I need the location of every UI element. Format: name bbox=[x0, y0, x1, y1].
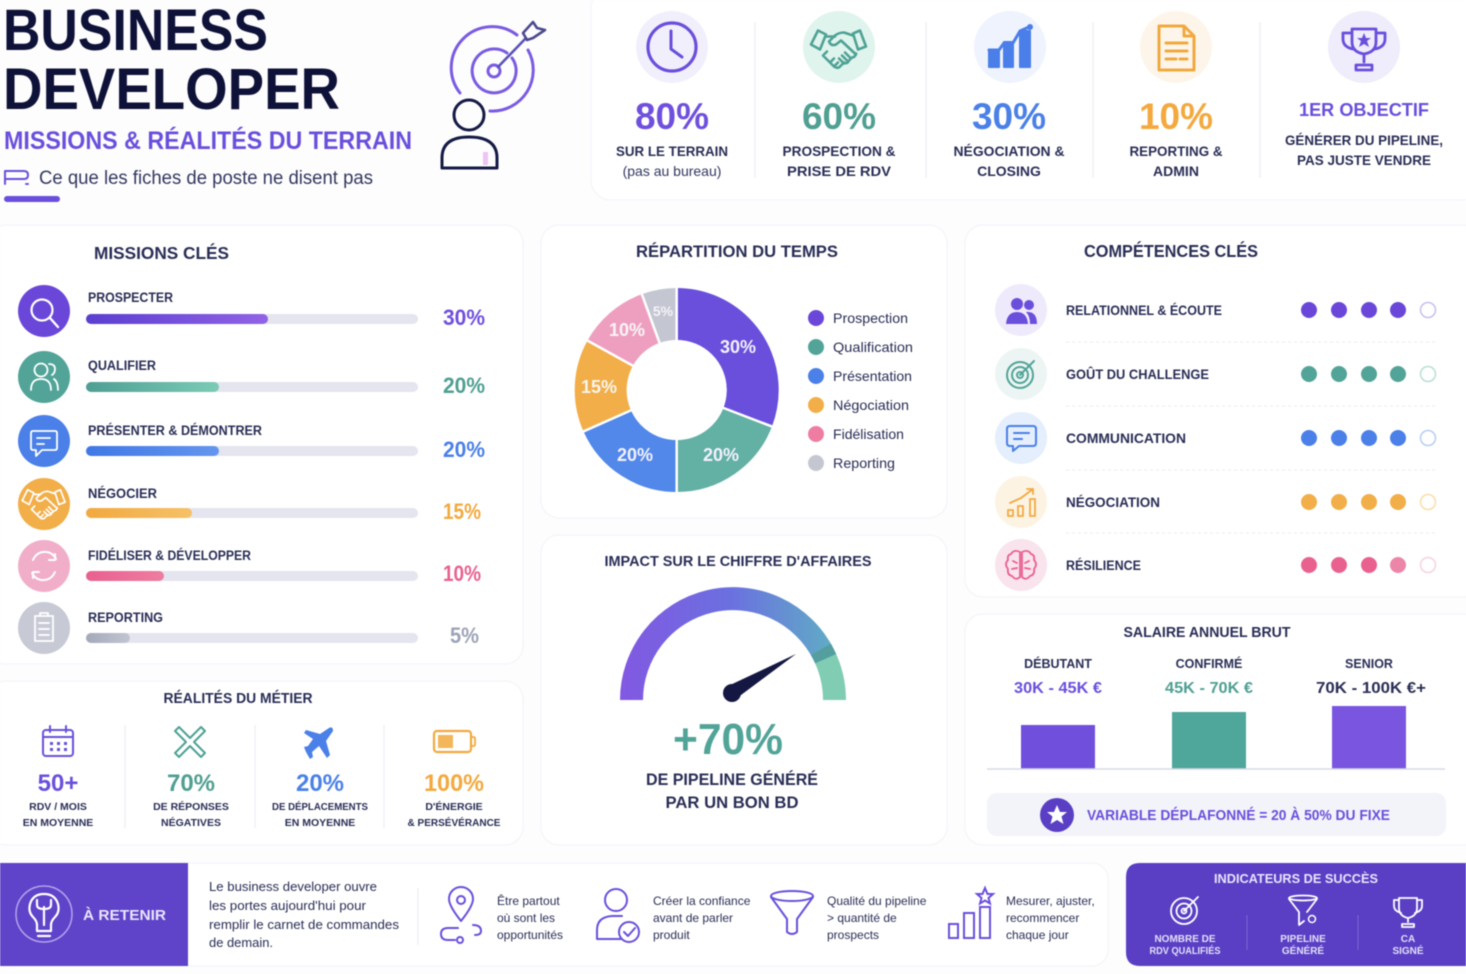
mission: fidéliser: FIDÉLISER & DÉVELOPPER bbox=[88, 548, 251, 563]
tip: confiance: Créer la confiance bbox=[653, 894, 751, 908]
salary: senior: SENIOR bbox=[1345, 657, 1393, 671]
reality: 100%: D'ÉNERGIE bbox=[425, 800, 483, 813]
legend: Négociation bbox=[833, 397, 909, 413]
heading: MISSIONS CLÉS bbox=[94, 242, 229, 263]
mission: fidéliser bbox=[18, 540, 481, 592]
mission: qualifier: 20% bbox=[443, 373, 485, 398]
mission: négocier: 15% bbox=[443, 499, 481, 524]
donut labels: 30% bbox=[720, 337, 756, 357]
stat: 60%: PROSPECTION & bbox=[782, 143, 896, 159]
tip: confiance: avant de parler bbox=[653, 911, 733, 925]
reality: 50+: EN MOYENNE bbox=[23, 817, 93, 829]
donut chart bbox=[581, 285, 775, 495]
stat: 10%: ADMIN bbox=[1153, 163, 1199, 179]
mission: présenter: PRÉSENTER & DÉMONTRER bbox=[88, 423, 262, 438]
donut labels: 5% bbox=[653, 303, 674, 319]
tip: mesurer: chaque jour bbox=[1006, 928, 1069, 942]
title: DEVELOPER bbox=[3, 57, 340, 122]
tip: pipeline: Qualité du pipeline bbox=[827, 894, 927, 908]
tip: confiance: produit bbox=[653, 928, 690, 942]
skill: relationnel: RELATIONNEL & ÉCOUTE bbox=[1066, 303, 1222, 318]
indicator: ca bbox=[1392, 898, 1424, 957]
heading: INDICATEURS DE SUCCÈS bbox=[1214, 871, 1378, 886]
salary: confirmé bbox=[1165, 656, 1253, 769]
skill: communication: COMMUNICATION bbox=[1066, 431, 1186, 446]
skill: résilience bbox=[995, 539, 1436, 591]
panel: salaire bbox=[965, 614, 1466, 845]
stat: 30%: NÉGOCIATION & bbox=[954, 143, 1064, 159]
mission: reporting: 5% bbox=[450, 623, 479, 648]
reality: 70% bbox=[153, 727, 229, 829]
indicator: ca: CA bbox=[1401, 934, 1415, 945]
tip: partout: où sont les bbox=[497, 911, 555, 925]
heading: RÉPARTITION DU TEMPS bbox=[636, 242, 838, 261]
indicator: pipeline bbox=[1280, 896, 1326, 957]
tip: pipeline bbox=[771, 891, 927, 942]
reality: 50+: RDV / MOIS bbox=[29, 801, 87, 813]
mission: négocier: NÉGOCIER bbox=[88, 486, 157, 501]
legend: Présentation bbox=[833, 368, 912, 384]
reality: 70%: 70% bbox=[167, 770, 215, 797]
salary: confirmé: 45K - 70K € bbox=[1165, 680, 1253, 697]
reality: 20%: EN MOYENNE bbox=[285, 817, 355, 829]
stat: 80%: 80% bbox=[635, 96, 709, 137]
mission: qualifier bbox=[18, 351, 485, 403]
heading: COMPÉTENCES CLÉS bbox=[1084, 240, 1258, 261]
reality: 20% bbox=[272, 727, 368, 829]
donut labels bbox=[581, 303, 756, 465]
legend: Reporting bbox=[833, 455, 895, 471]
salary: débutant: 30K - 45K € bbox=[1014, 680, 1102, 697]
stat: 10% bbox=[1130, 11, 1222, 179]
reality: 100%: & PERSÉVÉRANCE bbox=[408, 816, 500, 829]
stat: 10%: REPORTING & bbox=[1130, 143, 1222, 159]
skill: relationnel bbox=[995, 284, 1436, 336]
indicator: rdv: NOMBRE DE bbox=[1154, 934, 1216, 945]
donut labels: 10% bbox=[609, 320, 645, 340]
mission: présenter: 20% bbox=[443, 437, 485, 462]
tip: partout bbox=[441, 887, 563, 943]
heading: RÉALITÉS DU MÉTIER bbox=[164, 690, 313, 707]
donut labels: 20% bbox=[703, 445, 739, 465]
gauge value: DE PIPELINE GÉNÉRÉ bbox=[646, 770, 818, 789]
stat: 30%: CLOSING bbox=[977, 163, 1041, 179]
reality: 20%: DE DÉPLACEMENTS bbox=[272, 800, 368, 813]
salary: senior bbox=[1316, 657, 1426, 769]
donut labels: 15% bbox=[581, 377, 617, 397]
title bbox=[3, 0, 340, 122]
legend: Prospection bbox=[833, 310, 908, 326]
tagline bbox=[4, 168, 373, 202]
mission: présenter bbox=[18, 415, 485, 467]
indicator: pipeline: GÉNÉRÉ bbox=[1282, 944, 1324, 957]
summary text: remplir le carnet de commandes bbox=[209, 917, 399, 932]
stat: first objective: GÉNÉRER DU PIPELINE, bbox=[1285, 132, 1443, 148]
gauge value bbox=[646, 715, 818, 812]
stat: 10%: 10% bbox=[1139, 96, 1213, 137]
tip: mesurer bbox=[949, 888, 1095, 942]
reality: 100%: 100% bbox=[424, 770, 484, 797]
panel: à retenir bbox=[0, 863, 1108, 966]
legend bbox=[808, 310, 913, 471]
tip: mesurer: recommencer bbox=[1006, 911, 1079, 925]
tip: mesurer: Mesurer, ajuster, bbox=[1006, 894, 1095, 908]
panel: réalités du métier bbox=[0, 681, 523, 845]
banner: À RETENIR bbox=[83, 907, 166, 924]
reality: 70%: NÉGATIVES bbox=[161, 816, 221, 829]
summary text: les portes aujourd'hui pour bbox=[209, 898, 367, 913]
mission: reporting bbox=[18, 602, 479, 654]
mission: prospecter: PROSPECTER bbox=[88, 290, 173, 305]
stat: 80%: SUR LE TERRAIN bbox=[616, 143, 728, 159]
stat: first objective: 1ER OBJECTIF bbox=[1299, 100, 1429, 120]
panel: missions clés bbox=[0, 225, 523, 664]
heading: SALAIRE ANNUEL BRUT bbox=[1124, 625, 1291, 641]
mission: prospecter bbox=[18, 285, 485, 337]
reality: 50+ bbox=[23, 726, 93, 829]
panel: compétences clés bbox=[965, 225, 1466, 597]
stat: 60%: 60% bbox=[802, 96, 876, 137]
reality: 50+: 50+ bbox=[38, 770, 78, 797]
reality: 70%: DE RÉPONSES bbox=[153, 800, 229, 813]
tip: partout: Être partout bbox=[497, 893, 560, 908]
stat: 80% bbox=[616, 11, 728, 179]
indicator: ca: SIGNÉ bbox=[1392, 944, 1424, 957]
summary text bbox=[209, 879, 399, 950]
panel: indicateurs de succès bbox=[1126, 863, 1466, 966]
skill: communication bbox=[995, 412, 1436, 464]
mission: négocier bbox=[18, 478, 481, 530]
gauge bbox=[632, 599, 836, 702]
stat: first objective: PAS JUSTE VENDRE bbox=[1297, 152, 1431, 168]
summary text: Le business developer ouvre bbox=[209, 879, 377, 894]
variable callout: VARIABLE DÉPLAFONNÉ = 20 À 50% DU FIXE bbox=[1087, 807, 1390, 824]
tip: pipeline: > quantité de bbox=[827, 911, 897, 925]
stat: 30% bbox=[954, 11, 1064, 179]
indicator: rdv: RDV QUALIFIÉS bbox=[1150, 944, 1221, 957]
salary: senior: 70K - 100K €+ bbox=[1316, 680, 1426, 697]
subtitle: MISSIONS & RÉALITÉS DU TERRAIN bbox=[4, 126, 412, 155]
skill: négociation: NÉGOCIATION bbox=[1066, 495, 1160, 510]
salary: confirmé: CONFIRMÉ bbox=[1176, 656, 1242, 671]
salary: débutant bbox=[1014, 656, 1102, 769]
skill: challenge: GOÛT DU CHALLENGE bbox=[1066, 367, 1209, 382]
skill: négociation bbox=[995, 476, 1436, 528]
tip: partout: opportunités bbox=[497, 928, 563, 942]
stat: first objective bbox=[1285, 11, 1443, 168]
tagline: Ce que les fiches de poste ne disent pas bbox=[39, 168, 373, 189]
skill: challenge bbox=[995, 348, 1436, 400]
reality: 100% bbox=[408, 731, 500, 829]
donut labels: 20% bbox=[617, 445, 653, 465]
mission: reporting: REPORTING bbox=[88, 610, 163, 625]
reality: 20%: 20% bbox=[296, 770, 344, 797]
panel: key figures bbox=[591, 0, 1466, 200]
heading: IMPACT SUR LE CHIFFRE D'AFFAIRES bbox=[604, 553, 872, 570]
panel: impact bbox=[541, 535, 947, 845]
gauge value: PAR UN BON BD bbox=[666, 793, 798, 812]
legend: Qualification bbox=[833, 339, 913, 355]
summary text: de demain. bbox=[209, 935, 273, 950]
mission: qualifier: QUALIFIER bbox=[88, 358, 156, 373]
skill: résilience: RÉSILIENCE bbox=[1066, 558, 1141, 573]
stat: 30%: 30% bbox=[972, 96, 1046, 137]
tip: confiance bbox=[597, 889, 751, 942]
salary: débutant: DÉBUTANT bbox=[1024, 656, 1092, 671]
icon: person with target bbox=[442, 22, 545, 168]
mission: prospecter: 30% bbox=[443, 305, 485, 330]
legend: Fidélisation bbox=[833, 426, 904, 442]
mission: fidéliser: 10% bbox=[443, 561, 481, 586]
panel: répartition du temps bbox=[541, 225, 947, 518]
variable callout bbox=[987, 793, 1446, 836]
stat: 60% bbox=[782, 11, 896, 179]
stat: 60%: PRISE DE RDV bbox=[787, 163, 892, 179]
indicator: rdv bbox=[1150, 897, 1221, 957]
indicator: pipeline: PIPELINE bbox=[1280, 934, 1326, 945]
stat: 80%: (pas au bureau) bbox=[623, 163, 721, 179]
tip: pipeline: prospects bbox=[827, 928, 879, 942]
gauge value: +70% bbox=[673, 715, 783, 764]
banner bbox=[0, 863, 188, 966]
